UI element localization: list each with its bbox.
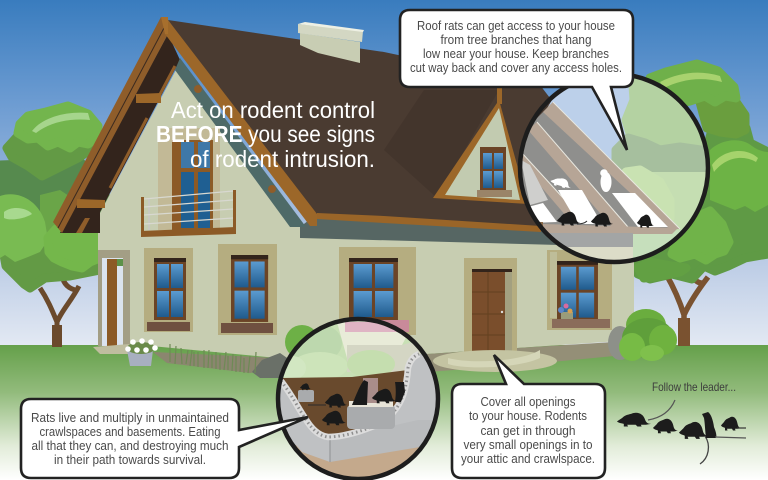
door — [464, 258, 517, 355]
callout: cover openings: very small openings in to — [464, 438, 593, 452]
callout: crawlspaces: in their path towards survival. — [54, 453, 206, 467]
chimney — [298, 22, 364, 63]
porch opening — [98, 250, 130, 349]
callout: cover openings: Cover all openings — [480, 395, 576, 409]
floor beam — [543, 224, 678, 234]
shrub behind crawlspace lens — [285, 325, 319, 359]
right bargeboard — [175, 58, 306, 227]
crawlspace earth — [282, 370, 404, 434]
heading: Act on rodent control — [171, 97, 375, 123]
follow the leader rats — [617, 400, 746, 464]
lens: crawlspace — [275, 315, 445, 480]
callout: cover openings: your attic and crawlspace. — [461, 452, 595, 466]
callout: crawlspaces: Rats live and multiply in unmaintained — [31, 411, 229, 425]
heading: BEFORE you see signs — [156, 121, 375, 147]
window 2 — [218, 244, 277, 335]
follow the leader caption: Follow the leader... — [652, 380, 736, 394]
left gable trim — [53, 17, 180, 233]
callout: roof rats — [400, 10, 633, 150]
balcony railing — [141, 190, 236, 237]
callout: cover openings: can get in through — [480, 424, 576, 438]
rafters — [515, 102, 680, 229]
sky — [0, 0, 768, 346]
heading: of rodent intrusion. — [190, 146, 375, 172]
faded tree inside lens — [612, 78, 706, 258]
front steps — [433, 350, 557, 372]
flower pot — [125, 338, 158, 366]
shrub — [608, 309, 677, 361]
white ghost rats — [550, 178, 571, 188]
ground: lawn — [0, 345, 768, 480]
callout: cover openings — [452, 355, 605, 478]
callout: crawlspaces: all that they can, and destroying much — [32, 439, 229, 453]
balcony window — [158, 128, 220, 230]
callout: roof rats: low near your house. Keep branches — [423, 47, 609, 61]
callout: roof rats: Roof rats can get access to your house — [417, 19, 615, 33]
callout: roof rats: cut way back and cover any access holes. — [410, 61, 622, 75]
insulation — [530, 203, 557, 222]
concrete piers — [298, 390, 314, 402]
black rats — [557, 212, 580, 225]
foundation — [153, 352, 277, 373]
beam ends — [136, 93, 161, 103]
main roof — [168, 20, 680, 231]
window 4 with flowers — [547, 250, 612, 330]
grasses — [170, 344, 256, 373]
heading — [156, 97, 375, 172]
rats in crawlspace — [300, 383, 311, 390]
lens: roof interior — [518, 74, 710, 264]
mound by lens — [252, 353, 290, 378]
callout: crawlspaces: crawlspaces and basements. Eating — [40, 425, 221, 439]
gable and wall — [98, 68, 634, 358]
right tree — [638, 64, 768, 346]
window 1 — [144, 248, 193, 332]
left tree — [0, 106, 112, 347]
dormer — [384, 88, 528, 204]
callout: roof rats: from tree branches that hang — [440, 33, 592, 47]
eave — [300, 214, 680, 247]
callout: cover openings: to your house. Rodents — [469, 409, 587, 423]
roof behind lens edge — [536, 100, 552, 118]
house — [53, 17, 680, 378]
window 3 — [339, 247, 416, 335]
callout: crawlspaces — [21, 399, 308, 478]
foundation block — [280, 354, 436, 462]
